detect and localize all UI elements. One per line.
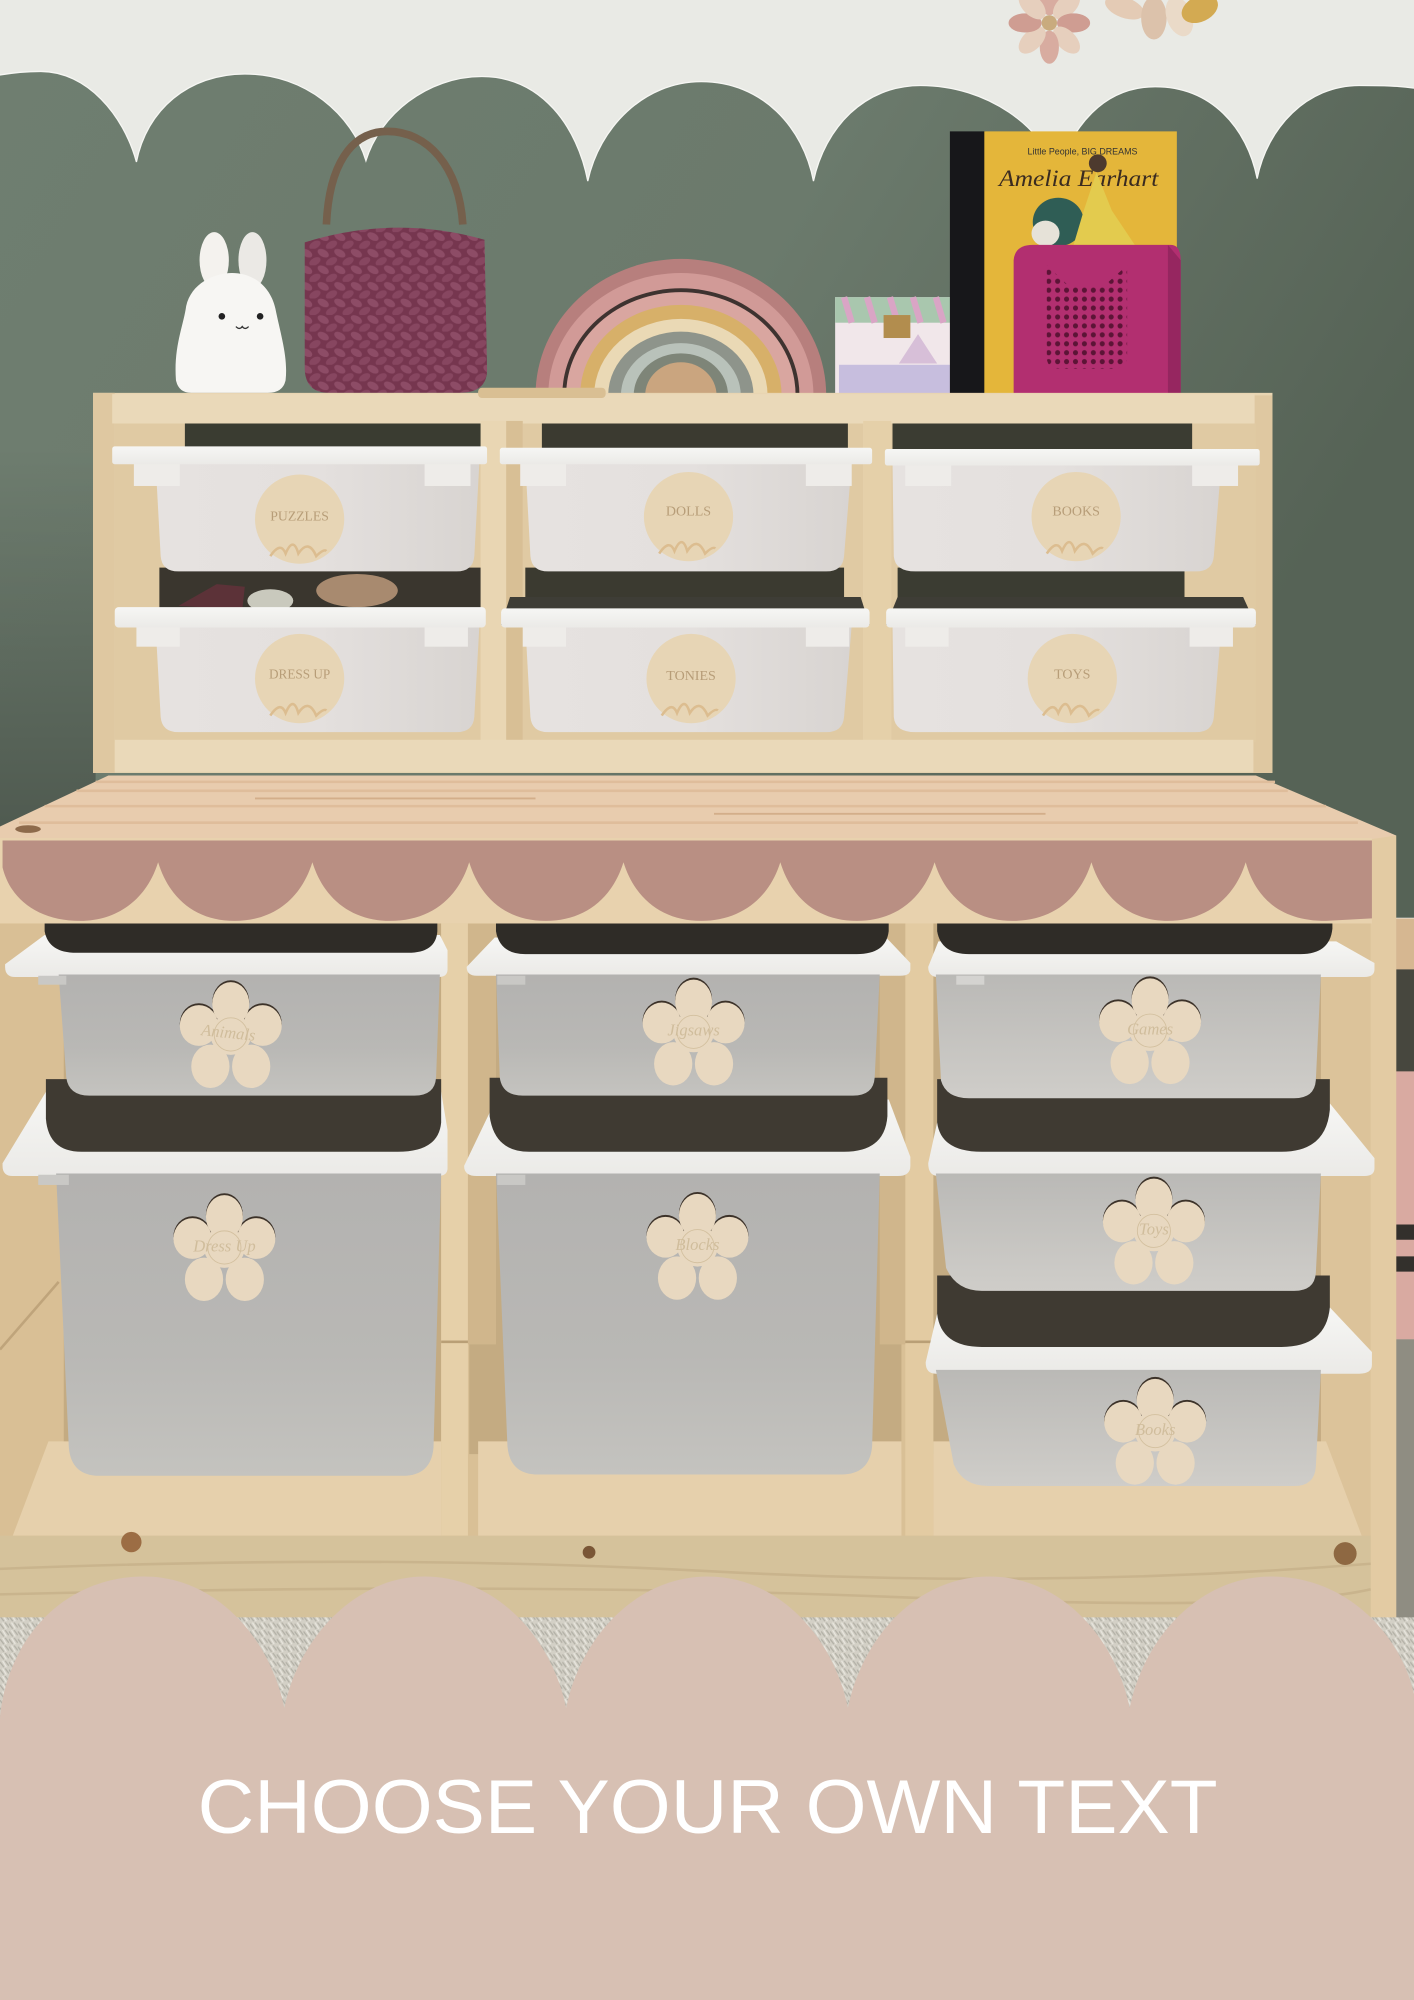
- label disc: TONIES: [666, 669, 716, 684]
- bin: toys: [928, 1079, 1374, 1291]
- label disc: [1028, 634, 1117, 723]
- front post right: [1371, 835, 1396, 1617]
- shelf dividers: [481, 421, 891, 753]
- flower label: dress up: [173, 1193, 275, 1301]
- book title: Little People, BIG DREAMS: [1028, 146, 1137, 156]
- icon: wooden stacking rainbow: [536, 259, 826, 395]
- label disc: [644, 472, 733, 561]
- flower label: dress up: Dress Up: [192, 1236, 256, 1255]
- flower label: games: [1099, 976, 1201, 1084]
- heading: CHOOSE YOUR OWN TEXT: [198, 1765, 1218, 1850]
- wall: green scalloped paint: [0, 71, 1414, 918]
- bin: dolls: [500, 448, 872, 571]
- dividers: [441, 923, 933, 1536]
- bin: books: [926, 1276, 1372, 1486]
- label disc: [255, 474, 344, 564]
- bin: books: [885, 449, 1260, 571]
- flower label: books: Books: [1135, 1420, 1175, 1439]
- flower label: books: [1104, 1377, 1206, 1485]
- bottom board: [115, 740, 1253, 772]
- panel: flower labels: [173, 976, 1206, 1485]
- small round wooden disc on shelf: [478, 388, 606, 398]
- bin: tonies: [501, 597, 870, 732]
- label disc: [1031, 472, 1121, 561]
- wall: off-white upper paint: [0, 0, 1414, 383]
- icon: white bunny lamp: [176, 232, 286, 393]
- label disc: PUZZLES: [270, 509, 329, 524]
- bin: jigsaws: [467, 923, 910, 1096]
- flower label: blocks: [646, 1192, 748, 1300]
- flower label: toys: [1103, 1177, 1205, 1284]
- bin: animals: [5, 923, 448, 1096]
- bin: games: [928, 923, 1374, 1098]
- flower label: games: Games: [1127, 1019, 1173, 1038]
- flower label: jigsaws: [643, 978, 745, 1085]
- flower label: animals: [180, 980, 282, 1088]
- label disc: BOOKS: [1052, 504, 1100, 519]
- flower label: toys: Toys: [1139, 1220, 1169, 1239]
- panel: table top: [0, 776, 1396, 839]
- front bottom board: [0, 1536, 1371, 1617]
- bin: dress up: [3, 1079, 448, 1476]
- label disc: DRESS UP: [269, 668, 330, 683]
- icon: unicorn music box: [835, 297, 965, 395]
- flower label: blocks: Blocks: [675, 1235, 720, 1254]
- panel: upper wooden shelf unit: [93, 388, 1272, 773]
- panel: upper row of white bins: [112, 446, 1260, 732]
- label disc: [646, 634, 736, 723]
- panel: front board with mauve scallops: [0, 838, 1372, 923]
- rug: [0, 1617, 1414, 1719]
- compartment floors: [13, 1441, 1362, 1536]
- top board: [112, 394, 1255, 423]
- icon: yellow book: [950, 131, 1177, 395]
- panel: lower grey bins: [3, 923, 1374, 1486]
- panel: pink scalloped footer: [0, 1577, 1414, 2000]
- bin: toys: [886, 597, 1256, 732]
- bin: dress up: [115, 607, 486, 732]
- flower label: animals: Animals: [199, 1020, 256, 1045]
- icon: pink tonie box: [1014, 245, 1181, 395]
- icon: yellow book: Amelia Earhart: [997, 166, 1159, 191]
- panel: lower wooden storage unit: [0, 835, 1396, 1617]
- label disc: DOLLS: [666, 504, 711, 519]
- bin: blocks: [464, 1078, 910, 1474]
- label disc: TOYS: [1054, 668, 1090, 683]
- panel: right-edge background objects: [1396, 918, 1414, 1620]
- bin: puzzles: [112, 446, 487, 571]
- flower label: jigsaws: Jigsaws: [667, 1021, 720, 1040]
- toys peeking from drawer: [179, 574, 398, 612]
- label disc: [255, 634, 344, 723]
- icon: crochet basket: [305, 131, 487, 393]
- icon: wall daisy flowers: [1009, 0, 1223, 64]
